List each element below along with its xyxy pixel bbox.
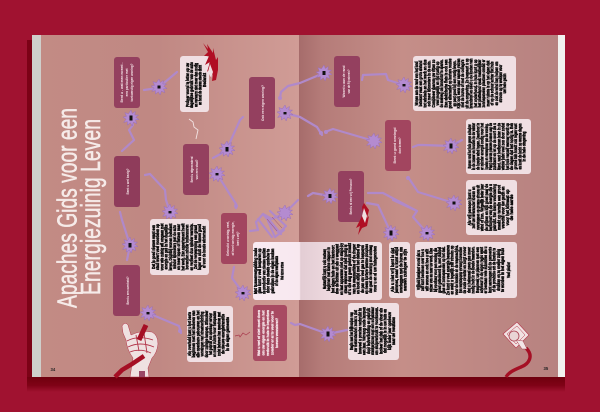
text box: right middle: koelen en verwarmen van de woning. [484, 124, 489, 169]
text box: bottom left [187, 306, 233, 362]
text box: lower right wide: zelf kunt beslissen over hoe u [420, 249, 425, 291]
text box: right lower: zelf uw leverancier kiezen en [471, 186, 476, 228]
text box: right middle: de dagen dat het nodig is. Een [509, 123, 514, 170]
text box: bottom centre right: Begin met het bijhouden van [349, 312, 354, 350]
text box: right top: Een elektrische fiets is ook een [443, 59, 448, 108]
text box: right middle: in de hele omgeving [522, 131, 527, 162]
question: bottom centre: zonder er al te veel voor te [270, 311, 274, 355]
text column: right of spine: en kook altijd met het deksel op [356, 244, 361, 294]
text box: right middle: er minder energie nodig voor het [480, 123, 485, 170]
text box: right top: of op de schuur achter het huis [490, 61, 495, 106]
text box: lower right wide: wilt wonen en ook hoe u wilt [424, 249, 429, 292]
question: bottom centre: verbruik in huis te beperken [266, 309, 270, 356]
text box: right top: tot winkels en het werk en dus [422, 59, 427, 108]
text column: left of spine: Met tussenverpakking zoals [253, 248, 258, 294]
question: bent u wat men noemt: een particulier met [125, 68, 129, 96]
text box: right middle: de koude wind tegen. Daardoor is [475, 123, 480, 170]
text box: right top: en ook de wind kan helpen om [494, 61, 499, 106]
text box: top left: dagelijkse gebruik van de auto [189, 62, 194, 108]
red squiggle [235, 332, 250, 337]
title: Energiezuinig Leven [75, 119, 106, 295]
magazine page edges [32, 35, 565, 377]
connector: question 2 to text [145, 174, 178, 220]
text box: bottom left: de nieuwe energietransitie [221, 314, 226, 354]
text box: bottom centre right: dat mogelijk is in uw huis en [383, 309, 388, 353]
text box: right middle: zuidkant en let op de soort die u [492, 123, 497, 170]
question: lower middle: bent u vrij? [236, 231, 240, 246]
text box: lower right wide: dat u helemaal geen gas meer [466, 247, 471, 293]
text box: bottom centre right [348, 303, 399, 360]
text box: bottom left: Als overheid kunt u het beste [187, 312, 192, 356]
connector: lower left question [120, 212, 138, 260]
text box: bottom centre right: uw meterstanden zodat u ziet [353, 310, 358, 352]
connector: tangle [250, 200, 298, 237]
text box: left middle: minder kilometers met de auto [172, 225, 177, 269]
question: right lower [338, 171, 364, 222]
connector: question to wide text [232, 267, 251, 301]
text box: left middle: stad levert veel voordelen op [155, 224, 160, 270]
text box: top left [180, 56, 209, 112]
question: bent u wat men noemt [114, 57, 140, 108]
text box: lower right wide: bij voorkeur voor een woning die [433, 248, 438, 292]
question: right top: Woont u aan de rand [342, 65, 346, 98]
text box: narrow: jammer, maar u kunt altijd [394, 247, 399, 294]
question: right middle [385, 120, 411, 171]
text box: lower right wide: reizen van en naar uw werk. Kies [429, 248, 434, 292]
text column: right of spine: van de wasmachine of de droger [351, 244, 356, 294]
text box: right top: de snelweg om brandstof te sparen. [439, 60, 444, 108]
question: bent u een overheid [113, 265, 140, 316]
connector: central to lower right [406, 176, 462, 211]
text box: right lower: de prijzen en kijk goed naar de [484, 184, 489, 231]
text box: right top: stroom op te wekken voor [498, 64, 503, 102]
magazine left shadow [27, 40, 32, 380]
text box: top left: en verwarm niet meer dan nodig [193, 63, 198, 107]
text box: lower right wide: glas en zonnepanelen op het dak. [441, 246, 446, 294]
text box: left middle: Dat is goed nieuws want een [151, 225, 156, 269]
text box: right top: het platteland vaak makkelijker [477, 59, 482, 108]
text box: right top: het onderhoud. In huis kunt u op [473, 59, 478, 108]
text box: left middle: Zet de verwarming een graad [193, 225, 198, 269]
text box: left middle [150, 219, 209, 275]
text box: narrow: Als u niet vrij bent is dat [390, 248, 395, 292]
text column: right of spine: Natuurlijk kunt u ook meteen [322, 249, 327, 289]
text box: left middle: en verliest dus minder warmte. [189, 224, 194, 270]
text box: bottom left: het gebruik van openbaar vervoer [208, 313, 213, 355]
connector: across spine upper [278, 65, 332, 100]
text box: right top: meer ruimte is op het eigen dak [485, 60, 490, 106]
magazine bottom shadow [27, 377, 565, 392]
text column: left of spine [253, 248, 284, 294]
question: bent u afgezonderd [183, 144, 209, 195]
text column: right of spine: dan gaat de rekening snel omlaag [368, 245, 373, 293]
text box: right lower: Als vrij persoon kunt u [467, 189, 472, 226]
question: bottom centre [253, 305, 287, 361]
connector: overheid to text [140, 305, 182, 333]
text box: bottom centre right: een jaar. Vervang oude lampen [362, 307, 367, 355]
connector: afgezonderd down [209, 166, 238, 208]
text box: narrow [389, 242, 410, 298]
question: lower middle [221, 213, 247, 264]
text box: left middle: af voor de koude winternacht [201, 226, 206, 268]
left page [41, 35, 299, 377]
text column: left of spine: gebruiken in de eigen keuken [270, 248, 275, 294]
text box: right top: en past goed bij een rustig leven. [452, 60, 457, 106]
text box: left middle: lager en sluit de ramen goed [197, 224, 202, 270]
text box: wide across spine [253, 242, 382, 300]
text column: right of spine: doe de lichten uit als u weggaat [335, 244, 340, 294]
text box: lower right wide: Bespreek uw plannen met een [475, 247, 480, 293]
text box: right lower: overstappen op groene stroom uit [475, 185, 480, 230]
text box: lower right wide: Vrijheid betekent vooral dat u [416, 250, 421, 290]
text box: right lower: gebruikt. Een kleine verandering [492, 184, 497, 231]
question: bent u wel bezig: Bent u wel bezig? [126, 168, 130, 194]
text column: right of spine [322, 243, 377, 295]
icon: red lightning middle [356, 203, 369, 235]
text box: left middle: bovendien minder buitenmuren [185, 224, 190, 270]
text box: right middle: kiest, want loofbomen laten in de [496, 123, 501, 170]
text column: right of spine: de pan om veel gas te besparen [360, 245, 365, 293]
text box: lower right wide: Een warmtepomp vervangt bovendien [458, 247, 463, 293]
question: bent u afgezonderd: van een stad? [195, 159, 199, 180]
text box: bottom left: alle openbare gebouwen en het [195, 310, 200, 358]
text column: left of spine: glas kunt u veel besparen op [257, 248, 262, 294]
text box: left middle: het werk. Een appartement heeft [180, 223, 185, 270]
text box: bottom centre right: om sluipverbruik te voorkomen. [374, 307, 379, 355]
text box: bottom centre right: Isoleer het dak of de vloer als [378, 308, 383, 354]
text box: bottom centre right: door ledverlichting en gebruik [366, 308, 371, 354]
text box: right top: goed alternatief op kortere routes [448, 58, 453, 108]
question: right middle: door bomen? [398, 137, 402, 154]
text box: right top: Combineer daarom uw ritten zo [431, 59, 436, 108]
text box: narrow: overleggen met de buren om [398, 247, 403, 293]
page number right: 35 [544, 366, 549, 371]
text column: left of spine: Veel succes ermee [280, 262, 284, 280]
text box: top left: Bedankt [202, 73, 207, 87]
text box: right top: met de buren of met de collega's [460, 59, 465, 108]
question: lower middle: Gebruikt u weinig, veel, [226, 221, 230, 256]
text box: bottom centre right: kijk ieder jaar opnieuw [387, 311, 392, 350]
connector: middle to tangle side [308, 188, 338, 204]
text box: bottom centre right: stekkerdozen met een schakelaar [370, 307, 375, 355]
question: bent u wel bezig [114, 156, 140, 207]
text box: bottom left: in de eigen gemeente [225, 317, 230, 351]
text column: left of spine: of de eigen werkplaats [274, 256, 279, 286]
text box: left middle: voor wie zuinig wil omgaan met [159, 223, 164, 270]
text box: right top: betekent vaak een grote afstand [418, 60, 423, 106]
text box: bottom centre right: naar uw resultaten [391, 317, 396, 345]
text box: right middle: winter juist veel zon door zodat [501, 123, 506, 171]
text box: left middle: en meer lopen of fietsen naar [176, 224, 181, 270]
text box: lower right wide: drukken en zo sneller zuinig [496, 249, 501, 291]
text column: right of spine: het eigen huis en het kantoor: [330, 245, 335, 293]
text box: right lower: de hele aarde [509, 194, 514, 220]
text column: right of spine: of u die dag geen gebruik maakt [347, 243, 352, 295]
question: right top: van de Rijnstreek? [347, 69, 351, 94]
text column: right of spine: en laat apparaten niet op stand-by [339, 243, 344, 295]
illustration: fist gripping red cable [115, 323, 158, 377]
text box: right top: veel mogelijk en rijd rustig op [435, 61, 440, 106]
text box: lower right wide: de oude cv-ketel en zorgt ervoor [462, 246, 467, 294]
text box: right middle: in de zomer en houden in de winter [471, 123, 476, 170]
text box: bottom left: door zuinige lampen. Stimuleer [204, 310, 209, 358]
connector: fork to lower boxes [368, 193, 435, 241]
text column: left of spine: de productie van nieuwe spullen [261, 248, 266, 294]
page number left: 34 [50, 367, 56, 372]
text box: right lower: herkomst van de energie die u [488, 184, 493, 231]
connector: right upper [362, 74, 412, 93]
connector: central question to text [413, 138, 462, 154]
connector: afgezonderd up [213, 117, 243, 158]
text box: bottom centre right: hoeveel u precies verbruikt in [357, 308, 362, 354]
text box: lower right wide: of de provincie om de kosten te [492, 248, 497, 292]
connector: bottom question to text [291, 323, 347, 342]
text box: right top: zonnepanelen plaatsen omdat er [481, 59, 486, 108]
text box: right top: Kijk ook eens naar samen reizen [456, 58, 461, 108]
connector: fork second branch [367, 203, 399, 241]
text box: lower right wide [415, 242, 517, 298]
text box: right top: ook meer kilometers in de auto. [427, 60, 432, 106]
text box: lower right wide: kunt aanvragen bij de gemeente [487, 247, 492, 293]
text box: right lower: maakt op termijn een groot [496, 185, 501, 230]
text box: lower right wide: te worden in het eigen huis [500, 248, 505, 292]
question: een eigen woning [249, 77, 275, 129]
text box: right middle: Bomen rond het huis geven schaduw [467, 124, 472, 168]
text box: right top [413, 56, 516, 111]
text box: right middle [466, 119, 531, 174]
text box: right lower [466, 180, 517, 235]
question: bottom centre: om uw eigen energie en het [262, 310, 266, 356]
text box: lower right wide: er bestaan vele subsidies die u [483, 246, 488, 294]
text box: right lower: verschil voor uw gezin en [501, 186, 506, 228]
text column: right of spine: voor u en al uw huisgenoten [372, 246, 377, 292]
illustration: wall socket and plug with red cable [503, 322, 530, 377]
icon: red lightning top [203, 43, 218, 81]
title [52, 108, 106, 308]
text box: lower right wide: voor de keuken en de wasmachine. [454, 245, 459, 295]
connector: question 1 to text [144, 72, 177, 95]
question: bent u wat men noemt: toekomstig eigen woning? [130, 63, 134, 102]
text box: narrow: samen zuiniger te zijn [403, 249, 408, 291]
text box: bottom left: beginnen met het isoleren van [191, 310, 196, 358]
connector: across spine lower [277, 105, 323, 135]
connector: question 2 to question 1 [122, 110, 139, 151]
question: bent u een overheid: Bent u een overheid? [126, 276, 130, 304]
question: bottom centre: Wat u wel of niet moet doen [257, 309, 261, 356]
text box: lower right wide: en wekt u tegelijk zelf stroom op [450, 245, 455, 294]
text box: right middle: het huis vanzelf warmer wordt op [505, 123, 510, 170]
text column: right of spine: staan wanneer dat niet nodig is [343, 244, 348, 294]
text box: right top: brandstof en deelt u de kosten van [469, 58, 474, 108]
text box: right top: Wonen aan de rand van het land [414, 61, 419, 106]
text column: left of spine: door deze steeds opnieuw te [266, 249, 271, 293]
text box: bottom left: en maak ruimte voor fietspaden [212, 311, 217, 357]
text column: right of spine: beginnen met kleine stappen in [326, 247, 331, 291]
text box: lower right wide: Veel plezier [506, 262, 511, 278]
text box: bottom left: vervangen van straatverlichting [200, 311, 205, 356]
question: right top [334, 56, 360, 107]
question: right lower: Bent u al een vrij Persoon? [349, 178, 353, 214]
text box: right lower: wind of zon. Vergelijk ieder jaar [480, 184, 485, 232]
connector: to central question [324, 129, 382, 149]
text box: left middle: leven. Dichtbij wonen betekent [168, 223, 173, 270]
text box: lower right wide: Zo kunt u veel energie besparen [445, 245, 450, 295]
text box: right lower: voor het klimaat op [505, 189, 510, 226]
right page [299, 35, 558, 377]
text box: top left: en houd de deuren steeds dicht [198, 65, 203, 105]
title: Apaches Gids voor een [52, 108, 82, 308]
text box: right middle: Plant daarom nieuwe bomen aan de [488, 123, 493, 170]
text column: right of spine: en neem kortere warme douches [364, 244, 369, 294]
text box: lower right wide: adviseur in de eigen regio want [479, 247, 484, 293]
question: een eigen woning: Ook een eigen woning? [261, 84, 265, 121]
text box: right middle: en koelt de lucht op warme dagen [517, 123, 522, 170]
text box: left middle: energie en gas in het dagelijks [164, 224, 169, 270]
question: lower middle: of heel weinig energie, [231, 222, 235, 256]
white squiggle [189, 119, 198, 139]
question: bent u afgezonderd: Bent u afgezonderd [190, 156, 194, 182]
text box: lower right wide: goed geïsoleerd is, met dubbel [437, 247, 442, 293]
text box: lower right wide: nodig hebt in de koude maanden. [471, 246, 476, 294]
question: bottom centre: hoeven veranderen? [275, 317, 279, 348]
text box: bottom left: zodat iedereen kan meedoen met [216, 312, 221, 356]
text box: right top: uit de omgeving. Zo bespaart u op [464, 58, 469, 108]
question: bent u wat men noemt: Bent u - wat men noemt - [120, 62, 124, 102]
text box: top left: Probeer vooral te letten op uw [185, 63, 190, 107]
question: right middle: Bent u goed omringd [393, 127, 397, 164]
text box: right top: uw hele gezin [502, 73, 507, 94]
text box: right middle: groene tuin houdt ook regen vast [513, 123, 518, 170]
